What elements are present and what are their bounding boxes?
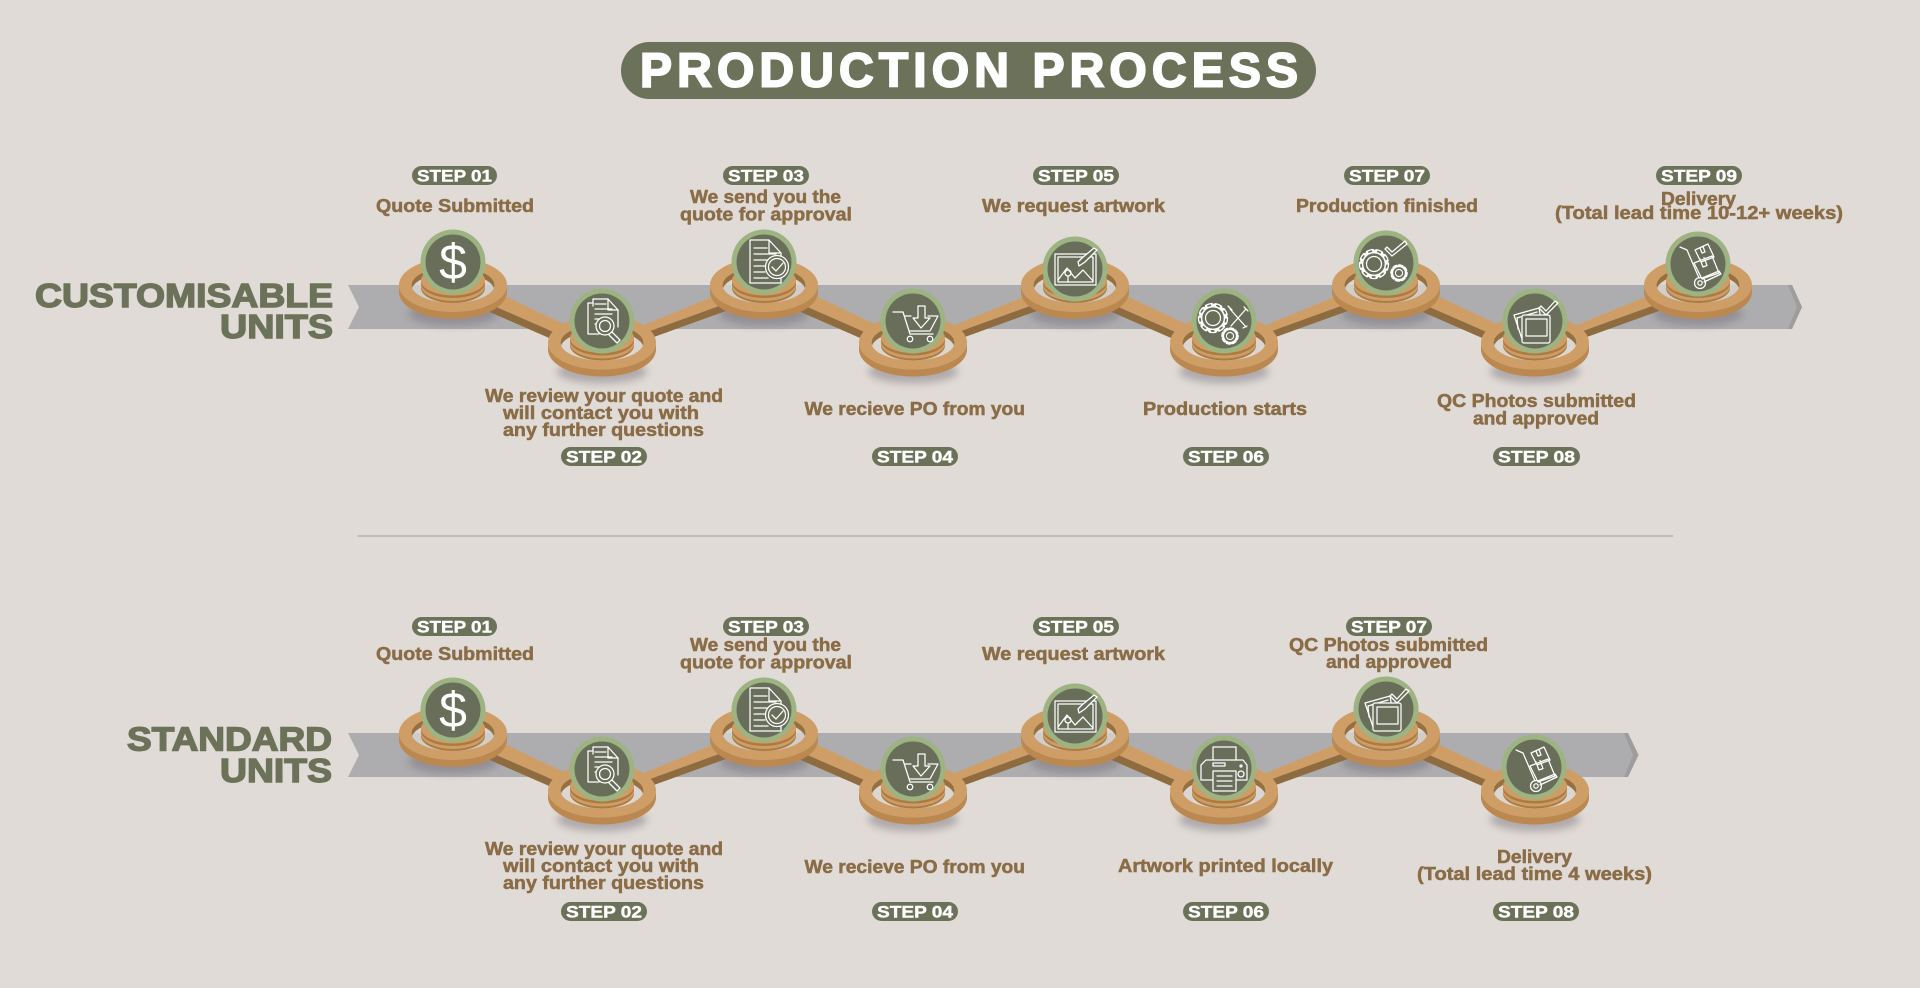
step 05 customisable: STEP 05	[1038, 168, 1114, 186]
step 08 customisable: and approved	[1473, 408, 1599, 428]
arrow band: standard units	[348, 733, 1638, 777]
step 08 customisable: QC Photos submitted	[1437, 391, 1636, 411]
title: PRODUCTION PROCESS	[640, 44, 1298, 98]
step 07 standard: QC Photos submitted	[1289, 635, 1488, 655]
step 06 customisable: Production starts	[1143, 399, 1307, 419]
step 01 customisable: $	[439, 234, 467, 290]
step 06 customisable	[1143, 288, 1307, 466]
step 02 customisable: We review your quote and	[485, 386, 723, 406]
step 05 standard	[982, 617, 1166, 748]
step 01 customisable	[376, 166, 534, 294]
heading: standard units	[127, 720, 332, 789]
heading: customisable units: UNITS	[220, 308, 333, 345]
step 08 customisable	[1437, 288, 1636, 466]
step 08 standard: (Total lead time 4 weeks)	[1417, 864, 1652, 884]
heading: customisable units: CUSTOMISABLE	[35, 277, 333, 314]
heading: standard units: UNITS	[220, 752, 332, 789]
step 09 customisable: STEP 09	[1661, 168, 1737, 186]
step 06 customisable: STEP 06	[1188, 448, 1264, 466]
heading: customisable units	[35, 277, 333, 345]
step 06 standard	[1118, 736, 1333, 922]
step 04 standard	[804, 736, 1025, 922]
step 03 customisable: STEP 03	[728, 168, 804, 186]
step 04 customisable: STEP 04	[877, 448, 954, 466]
step 03 customisable: We send you the	[690, 187, 841, 207]
step 08 standard: Delivery	[1497, 847, 1572, 867]
track: standard units	[399, 703, 1589, 832]
step 02 customisable	[485, 288, 723, 466]
step 05 standard: We request artwork	[982, 644, 1166, 664]
step 01 standard: $	[439, 682, 467, 738]
step 06 standard: STEP 06	[1188, 904, 1264, 922]
step 05 customisable	[982, 166, 1166, 302]
step 02 customisable: any further questions	[503, 420, 704, 440]
step 09 customisable: Delivery	[1661, 189, 1736, 209]
step 02 customisable: will contact you with	[502, 403, 699, 423]
step 05 standard: STEP 05	[1038, 618, 1114, 636]
step 02 standard: any further questions	[503, 873, 704, 893]
step 04 customisable	[804, 288, 1025, 466]
step 08 customisable: STEP 08	[1498, 448, 1575, 466]
track: customisable units	[399, 255, 1752, 384]
step 07 customisable: STEP 07	[1349, 168, 1425, 186]
step 09 customisable: (Total lead time 10-12+ weeks)	[1555, 203, 1843, 223]
step 04 standard: STEP 04	[877, 904, 954, 922]
step 07 standard: STEP 07	[1351, 618, 1427, 636]
step 01 standard	[376, 617, 534, 742]
step 04 customisable: We recieve PO from you	[804, 399, 1025, 419]
step 02 customisable: STEP 02	[566, 448, 642, 466]
step 03 standard	[680, 617, 852, 742]
arrow band: customisable units	[348, 285, 1802, 329]
step 08 standard	[1417, 734, 1652, 922]
step 02 standard: We review your quote and	[485, 839, 723, 859]
step 01 standard: STEP 01	[417, 618, 492, 636]
step 06 standard: Artwork printed locally	[1118, 856, 1333, 876]
step 05 customisable: We request artwork	[982, 196, 1166, 216]
step 02 standard: will contact you with	[502, 856, 699, 876]
step 07 customisable	[1296, 166, 1478, 296]
divider	[358, 535, 1673, 537]
step 03 customisable: quote for approval	[680, 204, 852, 224]
heading: standard units: STANDARD	[127, 720, 332, 758]
step 07 standard: and approved	[1326, 652, 1452, 672]
step 03 standard: We send you the	[690, 635, 841, 655]
step 02 standard	[485, 736, 723, 922]
step 07 customisable: Production finished	[1296, 196, 1478, 216]
step 09 customisable	[1555, 166, 1843, 296]
step 04 standard: We recieve PO from you	[804, 857, 1025, 877]
step 02 standard: STEP 02	[566, 904, 642, 922]
step 01 standard: Quote Submitted	[376, 644, 534, 664]
step 03 standard: quote for approval	[680, 652, 852, 672]
step 01 customisable: STEP 01	[417, 168, 492, 186]
step 01 customisable: Quote Submitted	[376, 196, 534, 216]
step 07 standard	[1289, 617, 1488, 742]
step 08 standard: STEP 08	[1498, 904, 1574, 922]
step 03 customisable	[680, 166, 852, 294]
step 03 standard: STEP 03	[728, 618, 804, 636]
